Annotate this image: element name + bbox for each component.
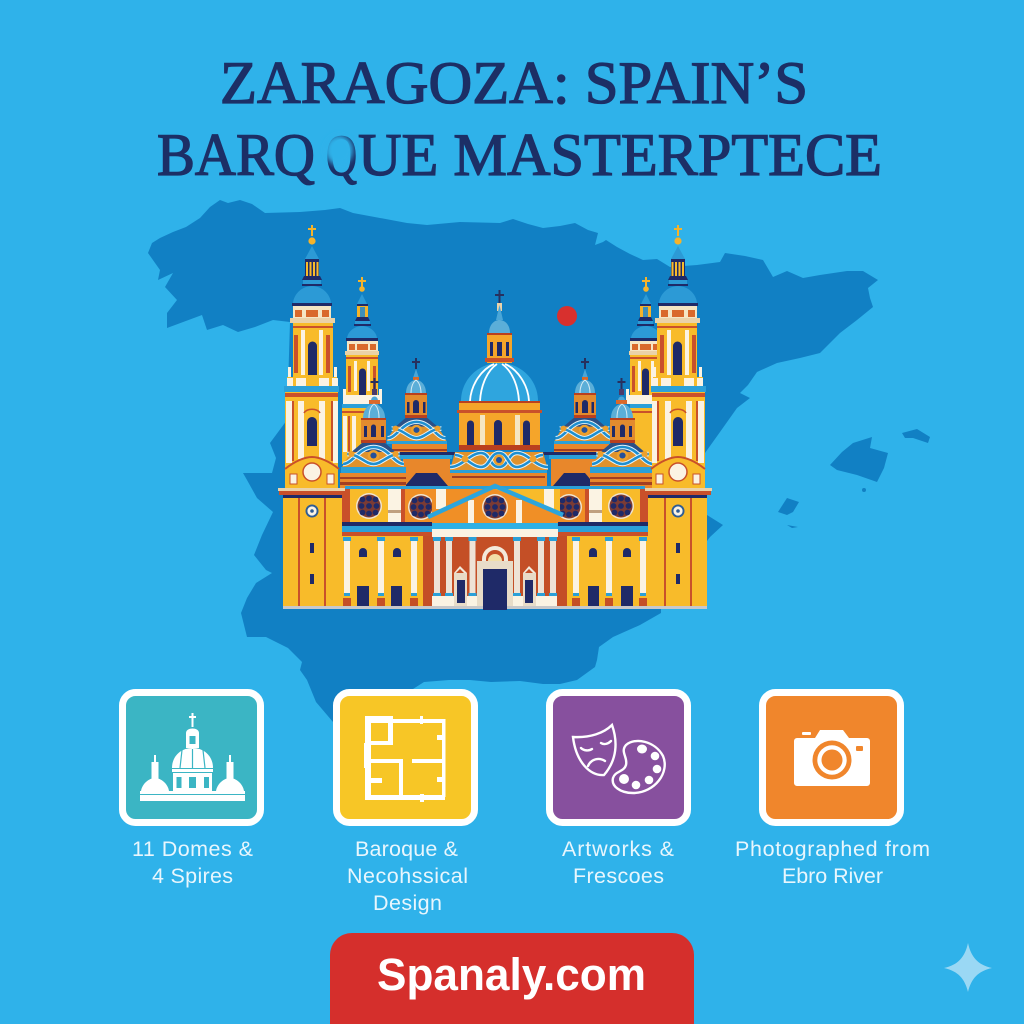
- icon: sparkle: [944, 943, 992, 992]
- label: baroque and neoclassical design: Necohssical: [347, 864, 468, 888]
- label: photographed from Ebro River: Ebro River: [782, 864, 883, 888]
- title: Q: [326, 123, 357, 188]
- icon: camera: [794, 730, 870, 786]
- icon: cathedral domes: [140, 713, 245, 801]
- card 3: artworks: [550, 692, 688, 822]
- website button: Spanaly.com: [377, 949, 646, 1000]
- title: [157, 50, 882, 188]
- location marker: Zaragoza: [557, 306, 577, 326]
- map of Spain: [148, 200, 930, 730]
- icon: theatre mask and palette: [573, 725, 665, 793]
- label: artworks and frescoes: [562, 837, 674, 888]
- label: baroque and neoclassical design: [347, 837, 468, 915]
- label: photographed from Ebro River: [735, 837, 930, 888]
- label: artworks and frescoes: Artworks &: [562, 837, 674, 861]
- title: ZARAGOZA: SPAIN’S: [220, 50, 808, 116]
- portico: [432, 523, 558, 610]
- cathedral illustration: [278, 225, 712, 610]
- card 4: photography: [762, 692, 900, 822]
- title: BARQ: [157, 122, 315, 188]
- label: domes and spires: [132, 837, 253, 888]
- label: domes and spires: 4 Spires: [152, 864, 233, 888]
- icon: floor plan: [364, 716, 446, 802]
- central tiled roof: [450, 452, 548, 487]
- label: domes and spires: 11 Domes &: [132, 837, 253, 861]
- label: baroque and neoclassical design: Design: [373, 891, 442, 915]
- label: artworks and frescoes: Frescoes: [573, 864, 664, 888]
- card 1: domes and spires: [122, 692, 260, 822]
- website button: [330, 933, 694, 1024]
- centre pediment: [345, 486, 645, 523]
- title: UE MASTERPTECE: [358, 122, 882, 188]
- card 2: floor plan: [336, 692, 474, 822]
- central dome: [457, 290, 542, 450]
- label: photographed from Ebro River: Photographed from: [735, 837, 930, 861]
- label: baroque and neoclassical design: Baroque &: [355, 837, 458, 861]
